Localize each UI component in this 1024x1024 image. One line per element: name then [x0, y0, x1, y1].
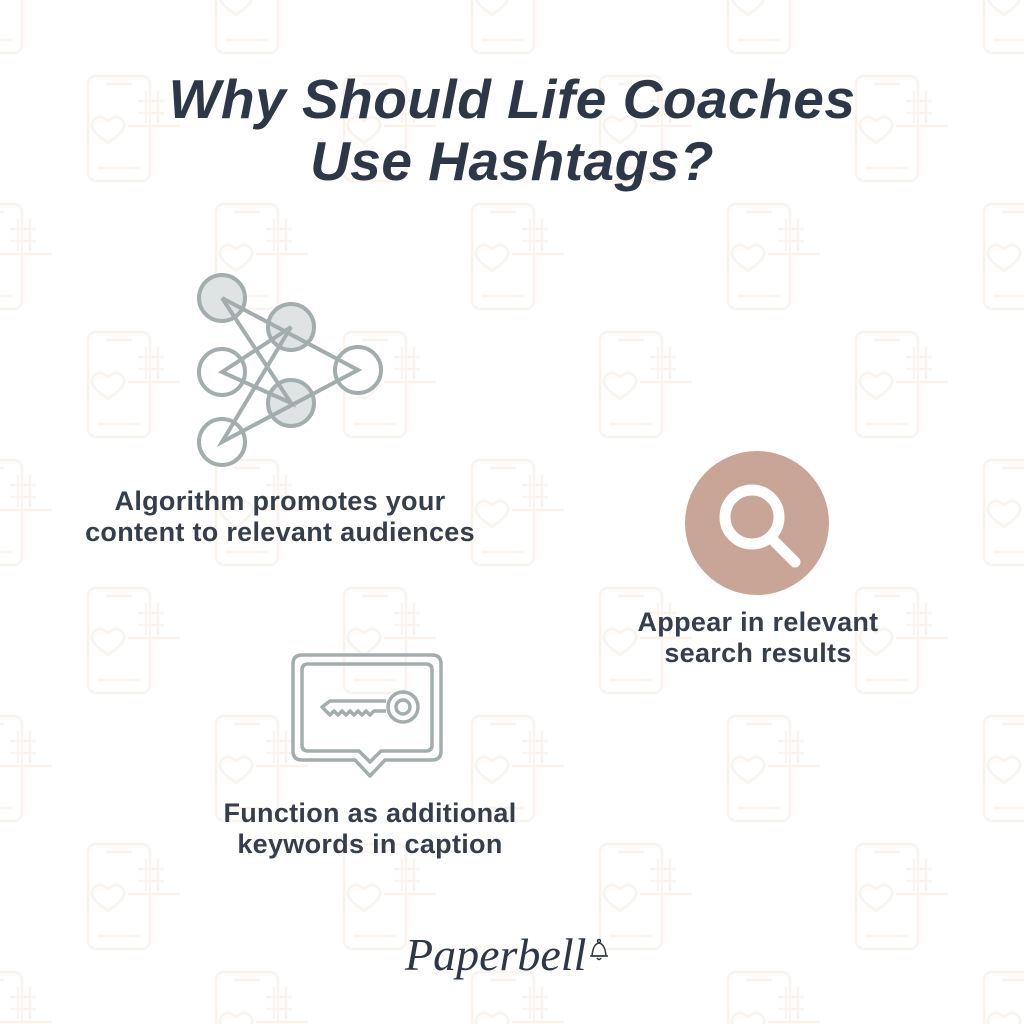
text: keywords: keywords in caption — [237, 829, 503, 859]
logo: Paperbell — [405, 929, 586, 980]
text: search: Appear in relevant — [638, 607, 878, 637]
icon: key bubble — [291, 653, 443, 778]
text: search — [638, 607, 878, 668]
text: search: search results — [664, 638, 852, 668]
text: algorithm: content to relevant audiences — [85, 517, 475, 547]
icon: search — [685, 451, 829, 595]
text: keywords: Function as additional — [223, 798, 517, 828]
icon: network — [197, 273, 383, 467]
text: algorithm — [85, 486, 475, 547]
text: algorithm: Algorithm promotes your — [115, 486, 445, 516]
text: keywords — [223, 798, 517, 859]
title: Why Should Life Coaches — [169, 68, 855, 130]
title: Use Hashtags? — [310, 130, 714, 192]
title — [169, 68, 855, 192]
